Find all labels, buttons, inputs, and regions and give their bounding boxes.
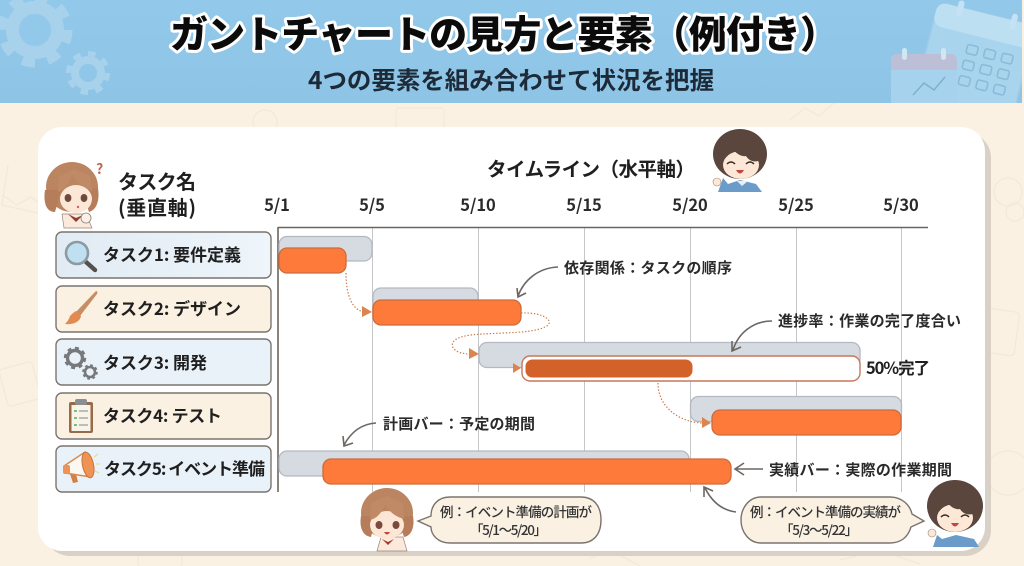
callout: actual example: 「5/3～5/22」 [780, 519, 858, 539]
task row 3: タスク3: 開発 [103, 349, 207, 374]
character: boy pointing top [713, 129, 767, 192]
task 4 bars [690, 396, 902, 435]
date labels: 5/10 [460, 192, 496, 216]
date labels: 5/15 [566, 192, 602, 216]
annotation: progress: 進捗率：作業の完了度合い [778, 310, 961, 331]
icon: megaphone [63, 451, 100, 483]
label: 50 percent: 50%完了 [866, 355, 930, 379]
task row 2 [56, 286, 271, 332]
heading: task column: タスク名 [118, 166, 196, 195]
arrow: example to actual end [704, 487, 736, 512]
gear large [2, 0, 68, 63]
annotation: planned bar [343, 413, 535, 446]
callout: planned example [418, 497, 601, 543]
character: girl bottom [360, 488, 414, 551]
task row 5 [56, 446, 271, 492]
task row 2: タスク2: デザイン [103, 295, 241, 320]
icon: paint brush [65, 291, 97, 324]
calendar large [924, 0, 1022, 103]
callout: actual example: 例：イベント準備の実績が [750, 501, 902, 521]
task row 1 [56, 232, 271, 278]
arrow: dependency task 2 to 3 [452, 313, 549, 373]
task 1 bars [279, 236, 372, 273]
date labels: 5/1 [264, 192, 290, 216]
task row 1: タスク1: 要件定義 [103, 241, 241, 266]
callout: actual example [741, 497, 924, 543]
annotation: progress [732, 310, 961, 351]
callout: planned example: 例：イベント準備の計画が [440, 501, 592, 521]
arrow: dependency task 3 to 4 [658, 383, 711, 428]
date labels: 5/20 [672, 192, 708, 216]
heading: task column [118, 166, 196, 221]
annotation: actual bar: 実績バー：実際の作業期間 [769, 459, 952, 480]
title: ガントチャートの見方と要素（例付き） [170, 4, 838, 59]
date labels: 5/25 [778, 192, 814, 216]
annotation: planned bar: 計画バー：予定の期間 [383, 413, 535, 434]
date labels [264, 192, 919, 216]
heading: task column: (垂直軸) [118, 192, 196, 221]
axes [278, 227, 928, 492]
panel: chart card [38, 127, 991, 556]
callout: planned example: 「5/1～5/20」 [470, 519, 547, 539]
task row 3 [56, 339, 271, 385]
icon: clipboard [69, 399, 93, 433]
task row 4: タスク4: テスト [103, 402, 222, 427]
header decorations: gears and calendars [2, 0, 1024, 128]
task row 4 [56, 393, 271, 439]
gear small [68, 54, 108, 92]
annotation: dependency [517, 257, 732, 297]
subtitle: 4つの要素を組み合わせて状況を把握 [308, 62, 714, 97]
icon: gears [66, 348, 96, 378]
header band [0, 0, 1022, 103]
character: girl thinking: ? [96, 159, 103, 179]
heading: timeline: タイムライン（水平軸） [487, 153, 695, 182]
task row 5: タスク5: イベント準備 [104, 455, 265, 480]
date labels: 5/5 [359, 192, 385, 216]
task 3 bars with progress [479, 342, 860, 381]
calendar small [891, 48, 957, 103]
task 2 bars [373, 288, 521, 325]
task 5 bars [279, 451, 731, 484]
arrow: dependency task 1 to 2 [346, 273, 372, 317]
character: boy bottom [927, 480, 983, 547]
date labels: 5/30 [883, 192, 919, 216]
gridlines [372, 228, 902, 492]
character: girl thinking [44, 159, 103, 228]
icon: magnifier [66, 242, 95, 270]
annotation: dependency: 依存関係：タスクの順序 [564, 257, 732, 278]
